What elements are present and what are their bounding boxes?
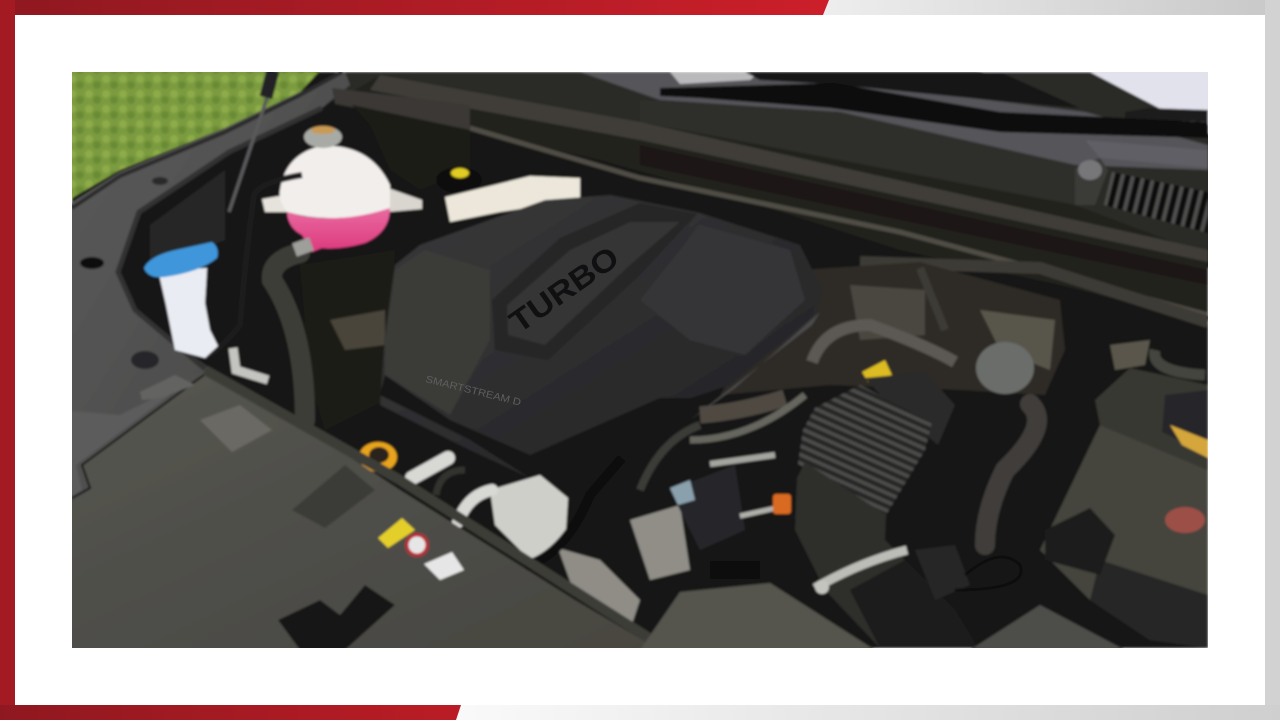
cowl panel [335,75,1208,322]
washer fluid bottle with blue cap [144,242,218,358]
engine cover [380,195,822,478]
turbo lettering: TURBO [503,239,625,340]
hose clamp [292,237,314,257]
bottom grey bar [450,705,1280,720]
wiper blade [745,72,1080,108]
hood underside and wiper [335,72,1220,270]
black radiator hose [272,253,305,420]
engine photo [60,60,1220,660]
sky background [978,72,1208,126]
smartstream lettering: SMARTSTREAM D [424,374,522,409]
wiper arm [660,83,1208,138]
top grey bar [820,0,1280,15]
washer / brake reservoir [445,176,580,222]
battery and fuse box [1040,368,1208,648]
warning stickers [378,518,464,580]
right grey bar [1265,0,1280,720]
left red bar [0,0,15,720]
bottom red bar [0,705,461,720]
coolant hose [280,170,304,184]
brake reservoir cap [436,167,482,193]
oil filler cap [359,442,397,472]
small silver connectors [233,348,268,380]
top red bar [0,0,829,15]
front shroud panel [60,370,1125,660]
left fender body [60,72,350,520]
hood strut [229,69,279,212]
lower engine block [403,389,988,623]
right side engine parts [720,262,1205,545]
coolant reservoir [262,126,422,252]
ventilation grille [1104,172,1208,233]
grass background [72,72,321,200]
ribbed intake duct [795,372,1021,648]
dark left cavity [115,88,471,391]
